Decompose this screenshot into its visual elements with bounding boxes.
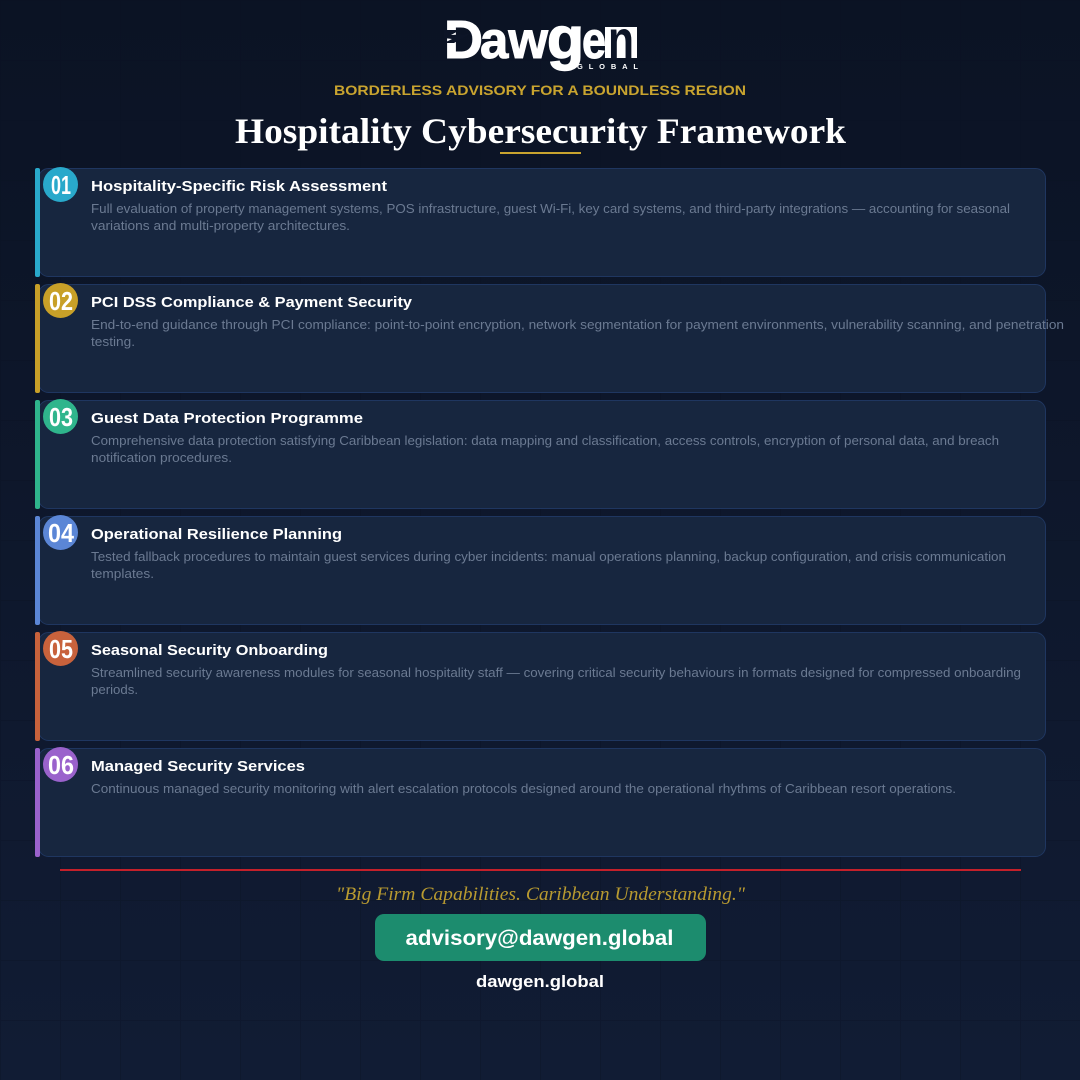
logo: Dawgen Global: g [547,6,584,71]
panel: step 04: Operational Resilience Planning [91,526,342,543]
panel: step 02: testing. [91,334,135,349]
panel: step 05 [35,631,1046,741]
panel: step 02: 02 [49,286,73,316]
panel: step 06: Continuous managed security monitoring with alert escalation protocols designed around the operational rhythms of Caribbean resort operations. [91,781,956,796]
panel: step 03 [35,399,1046,509]
panel: step 04 [35,515,1046,625]
panel: step 01: Hospitality-Specific Risk Assessment [91,178,387,195]
panel: step 04: templates. [91,566,154,581]
panel: step 05: 05 [49,634,73,664]
panel: step 01 [35,167,1046,277]
eyebrow tagline: BORDERLESS ADVISORY FOR A BOUNDLESS REGION [334,82,746,98]
panel: step 06 [35,747,1046,857]
panel: step 03: 03 [49,402,73,432]
panel: step 04: 04 [48,518,74,548]
panel: step 06: 06 [48,750,74,780]
panel: step 02: PCI DSS Compliance & Payment Security [91,294,413,311]
panel: step 05: Streamlined security awareness modules for seasonal hospitality staff — covering critical security behaviours in formats designed for compressed onboarding [91,665,1021,680]
panel: step 03: Comprehensive data protection satisfying Caribbean legislation: data mapping and classification, access controls, encryption of personal data, and breach [91,433,999,448]
logo: Dawgen Global: aw [480,12,549,70]
panel: step 02 [35,283,1064,393]
panel: step 05: periods. [91,682,138,697]
panel: step 03: Guest Data Protection Programme [91,410,363,427]
panel: step 01: 01 [51,170,71,200]
logo: Dawgen Global: n [608,10,634,70]
panel: step 01: Full evaluation of property management systems, POS infrastructure, guest Wi-Fi, key card systems, and third-party integrations — accounting for seasonal [91,201,1010,216]
email button [375,914,706,961]
logo: Dawgen Global: D [444,10,483,70]
panel: step 05: Seasonal Security Onboarding [91,642,328,659]
logo: Dawgen Global [444,6,638,71]
email button: advisory@dawgen.global [406,927,674,950]
panel: step 03: notification procedures. [91,450,232,465]
logo: Dawgen Global: GLOBAL [577,62,638,71]
footer quote: "Big Firm Capabilities. Caribbean Understanding." [336,885,745,905]
title underline [500,152,581,154]
panel: step 04: Tested fallback procedures to maintain guest services during cyber incidents: manual operations planning, backup configuration, and crisis communication [91,549,1006,564]
panel: step 02: End-to-end guidance through PCI compliance: point-to-point encryption, network segmentation for payment environments, vulnerability scanning, and penetration [91,317,1064,332]
panel: step 01: variations and multi-property architectures. [91,218,350,233]
title: Hospitality Cybersecurity Framework [235,111,846,151]
logo: Dawgen Global: e [582,12,606,70]
website: dawgen.global [476,972,604,991]
panel: step 06: Managed Security Services [91,758,305,775]
